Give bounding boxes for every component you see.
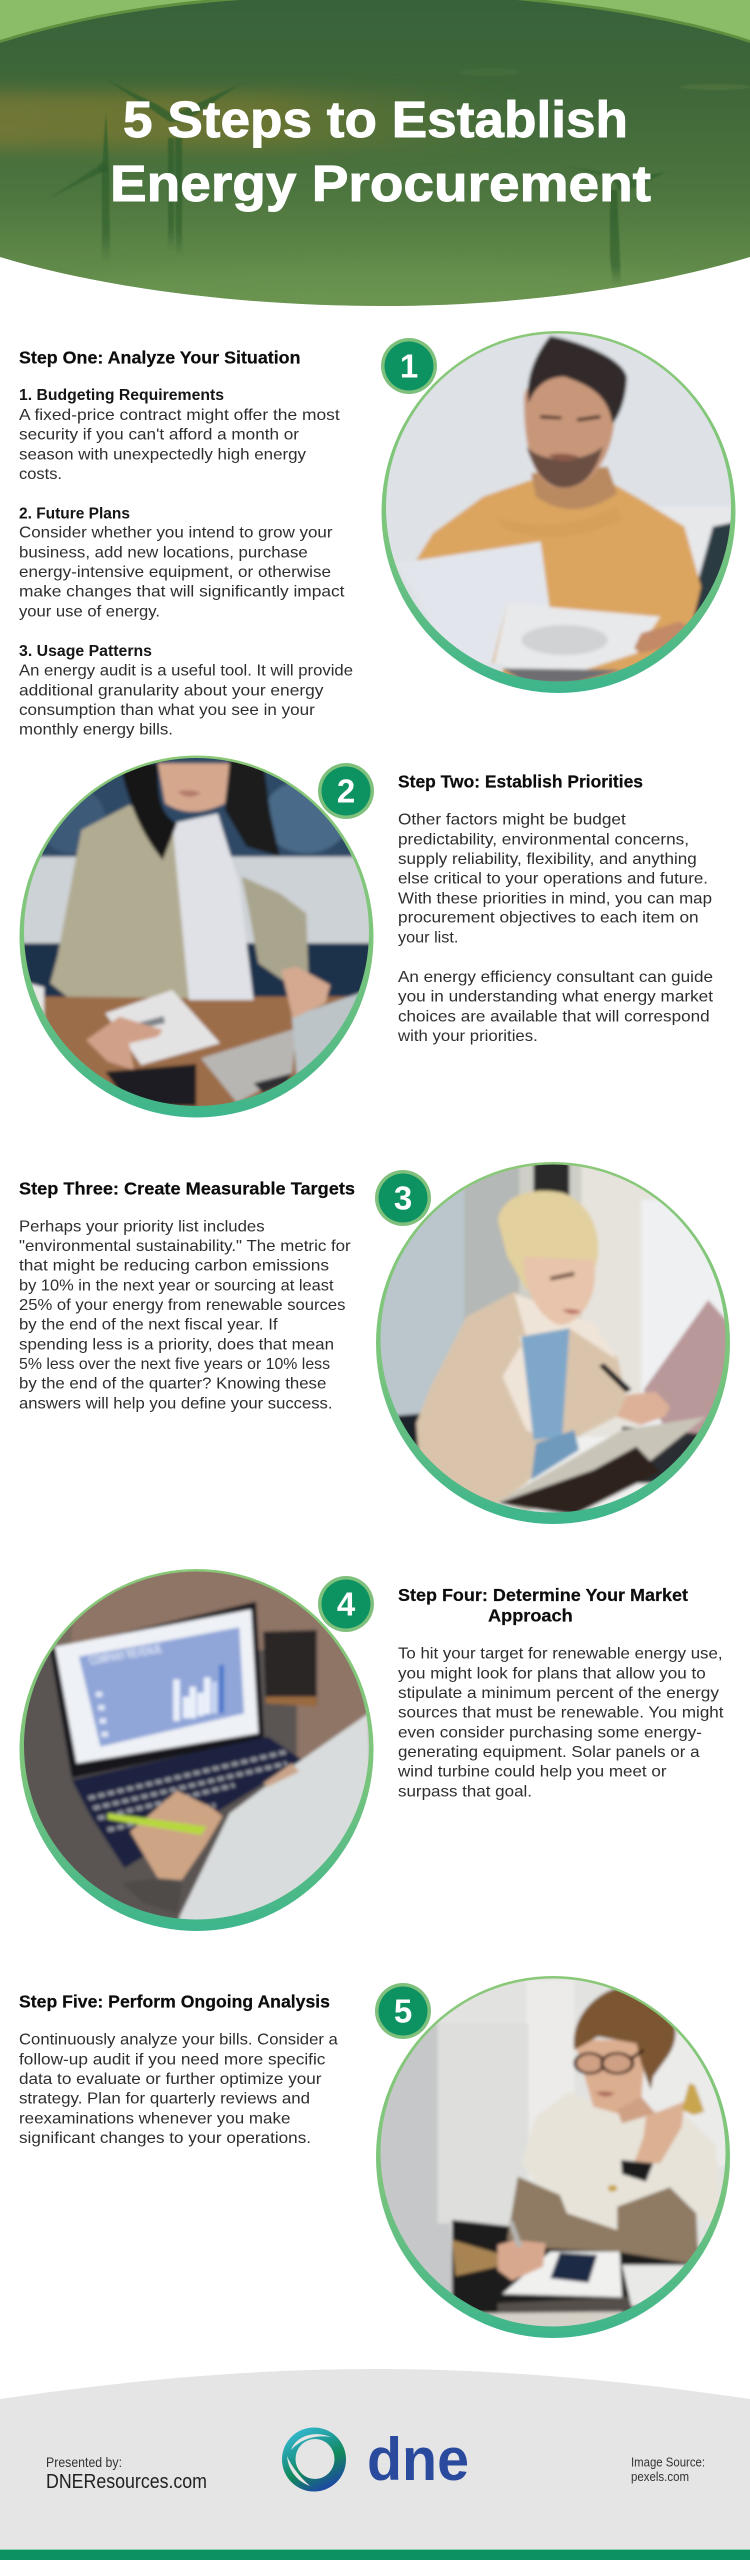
text block: step four body: even consider purchasing some energy- [398,1724,702,1741]
text block: future plans: 2. Future Plans [19,505,130,522]
title: 5 Steps to Establish [123,91,628,148]
text block: usage patterns: An energy audit is a useful tool. It will provide [19,663,353,680]
text block: step three body: 25% of your energy from renewable sources [19,1297,346,1314]
text block: step four body [397,1646,724,1800]
heading: step five: Step Five: Perform Ongoing Analysis [19,1992,330,2012]
badge: number 3 [375,1170,431,1226]
image source text: pexels.com [631,2469,689,2484]
heading: step four [398,1585,688,1626]
text block: step three body: by the end of the next fiscal year. If [19,1317,278,1334]
text block: step four body: you might look for plans that allow you to [398,1665,706,1682]
heading: step four: Step Four: Determine Your Market [398,1585,688,1605]
panel: step five text [19,1992,338,2147]
text block: step four body: surpass that goal. [398,1783,532,1800]
presented by text: Presented by: [46,2455,122,2470]
text block: step three body: spending less is a priority, does that mean [19,1336,334,1353]
logo: dne [282,2426,469,2493]
text block: usage patterns: 3. Usage Patterns [19,643,152,660]
text block: step three body [19,1218,351,1412]
heading: step four: Approach [488,1606,573,1626]
logo: dne: dne [367,2426,469,2493]
text block: future plans: your use of energy. [19,603,160,620]
text block: step two body: supply reliability, flexibility, and anything [398,851,697,868]
photo circle 4: laptop with company revenue chart [10,1563,383,1933]
text block: step two body: with your priorities. [397,1028,538,1045]
title: Energy Procurement [110,155,651,212]
panel: step four text [397,1585,724,1800]
text block: step two body: you in understanding what energy market [398,989,714,1006]
text block: future plans: Consider whether you intend to grow your [19,525,333,542]
title [110,91,651,212]
text block: future plans: business, add new locations, purchase [19,544,308,561]
text block: step two body: An energy efficiency consultant can guide [398,969,713,986]
text block: step two body: choices are available that will correspond [398,1008,710,1025]
text block: step three body: Perhaps your priority list includes [19,1218,265,1235]
badge: number 1: 1 [400,348,418,384]
text block: step two body: Other factors might be budget [398,811,627,828]
text block: step two body: predictability, environmental concerns, [398,831,689,848]
image source text: Image Source: [631,2454,705,2470]
photo circle 5: woman with glasses at desk [368,1970,750,2338]
photo circle 1: man reading papers [382,331,736,693]
text block: step four body: generating equipment. Solar panels or a [398,1744,700,1761]
heading: step two: Step Two: Establish Priorities [398,772,643,792]
text block: usage patterns [19,643,353,739]
text block: step three body: by 10% in the next year or sourcing at least [19,1277,334,1294]
text block: budgeting requirements: season with unexpectedly high energy [19,446,306,463]
badge: number 5: 5 [394,1992,412,2030]
text block: step four body: To hit your target for renewable energy use, [398,1646,722,1663]
panel: step two text [397,772,714,1045]
text block: usage patterns: monthly energy bills. [19,722,173,739]
heading: step three: Step Three: Create Measurable Targets [19,1178,355,1198]
text block: budgeting requirements: 1. Budgeting Requirements [19,387,224,404]
text block: step five body: data to evaluate or further optimize your [19,2071,322,2088]
text block: step two body: your list. [398,930,458,947]
presented by text: DNEResources.com [46,2470,207,2493]
badge: number 1 [381,338,437,394]
text block: step three body: "environmental sustainability." The metric for [19,1238,351,1255]
text block: step two body [397,811,714,1045]
panel: step one text [19,347,353,739]
text block: step five body: Continuously analyze your bills. Consider a [19,2032,338,2049]
presented by text [46,2455,207,2493]
text block: usage patterns: consumption than what you see in your [19,702,315,719]
text block: step four body: wind turbine could help you meet or [397,1764,666,1781]
panel: step three text [19,1178,355,1412]
text block: step two body: With these priorities in mind, you can map [398,890,712,907]
photo circle 4: laptop with company revenue chart: COMPANY REVENUE [87,1642,164,1668]
header photo: wind turbines [0,68,750,309]
text block: budgeting requirements: security if you can't afford a month or [19,426,299,444]
badge: number 2 [318,763,374,819]
text block: step three body: 5% less over the next five years or 10% less [19,1356,330,1373]
text block: step five body: strategy. Plan for quarterly reviews and [19,2091,310,2108]
text block: step two body: procurement objectives to each item on [398,910,699,927]
footer bar [0,2549,750,2560]
badge: number 4: 4 [337,1586,356,1622]
text block: budgeting requirements: costs. [19,466,62,483]
text block: future plans [19,505,345,620]
header background [0,0,750,309]
badge: number 3: 3 [394,1180,412,1216]
text block: usage patterns: additional granularity about your energy [19,682,324,699]
text block: budgeting requirements [19,387,340,483]
image source text [631,2454,705,2484]
photo circle 3: woman writing on clipboard [376,1162,730,1524]
text block: budgeting requirements: A fixed-price contract might offer the most [19,407,340,424]
badge: number 2: 2 [337,772,355,810]
text block: step three body: answers will help you define your success. [19,1395,332,1412]
text block: step five body [19,2032,338,2147]
badge: number 5 [375,1983,431,2039]
text block: step two body: else critical to your operations and future. [398,870,708,887]
text block: future plans: make changes that will significantly impact [19,584,345,601]
text block: step five body: significant changes to your operations. [19,2130,311,2147]
heading: step one: Step One: Analyze Your Situation [19,347,300,367]
text block: step five body: reexaminations whenever you make [19,2110,290,2127]
text block: step three body: by the end of the quarter? Knowing these [19,1376,326,1393]
text block: step five body: follow-up audit if you need more specific [19,2051,326,2068]
text block: step four body: sources that must be renewable. You might [398,1705,724,1722]
text block: future plans: energy-intensive equipment, or otherwise [19,564,331,581]
icon: logo ring [282,2428,346,2492]
photo circle 2: woman with calculator [10,750,383,1118]
badge: number 4 [318,1576,374,1632]
text block: step three body: that might be reducing carbon emissions [19,1258,329,1275]
footer panel [0,2369,750,2560]
text block: step four body: stipulate a minimum percent of the energy [398,1685,719,1702]
